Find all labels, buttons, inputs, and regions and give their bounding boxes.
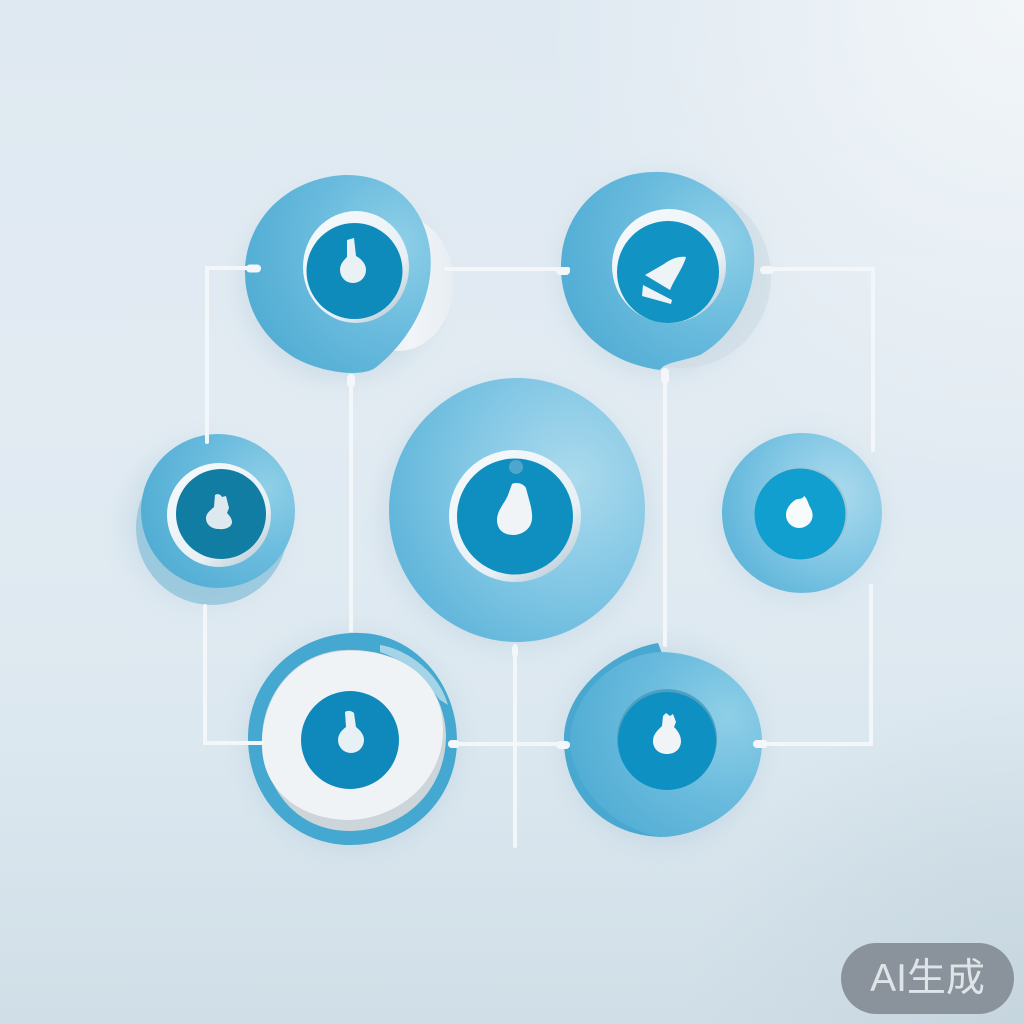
white ring xyxy=(303,211,409,323)
white ring xyxy=(167,463,271,567)
inner disc xyxy=(617,221,719,323)
grey back disc xyxy=(593,186,771,368)
icon: pear xyxy=(497,483,532,535)
inner disc xyxy=(176,469,266,559)
node: top right xyxy=(561,172,771,373)
node: left xyxy=(129,434,295,605)
inner disc xyxy=(618,692,716,790)
inner disc xyxy=(301,691,399,789)
icon: sail xyxy=(642,257,686,304)
blue blob xyxy=(245,175,431,373)
node: bottom right xyxy=(564,643,762,841)
white disc top xyxy=(262,651,443,820)
node: center xyxy=(387,378,645,643)
inner disc xyxy=(457,458,573,574)
darker back crescent xyxy=(564,643,750,837)
blue outer disc xyxy=(248,633,457,845)
white ring xyxy=(612,209,726,323)
big blue disc xyxy=(389,378,645,642)
white ring xyxy=(449,450,581,582)
icon: drop xyxy=(206,494,232,529)
icon: pear xyxy=(653,713,681,754)
node: top left xyxy=(245,175,454,377)
badge: AI generated: AI生成 xyxy=(870,957,985,1000)
white disc side xyxy=(262,650,446,831)
icon: drop xyxy=(786,496,813,528)
connector lines xyxy=(205,268,873,846)
badge: AI generated xyxy=(841,943,1014,1014)
node: bottom left xyxy=(248,633,457,846)
rim xyxy=(617,689,717,789)
light blob xyxy=(570,652,762,837)
icon: thermometer bulb xyxy=(338,711,364,753)
inner disc xyxy=(306,223,402,319)
blue disc xyxy=(722,433,882,593)
blue blob xyxy=(561,172,754,370)
icon: keyhole drop xyxy=(340,238,366,283)
blue blob xyxy=(141,434,295,588)
rim xyxy=(754,467,848,560)
bubble xyxy=(509,460,523,474)
node: right xyxy=(722,433,882,594)
inner disc xyxy=(754,468,846,560)
highlight xyxy=(380,645,448,705)
white back disc xyxy=(342,215,454,351)
back disc xyxy=(136,451,288,605)
